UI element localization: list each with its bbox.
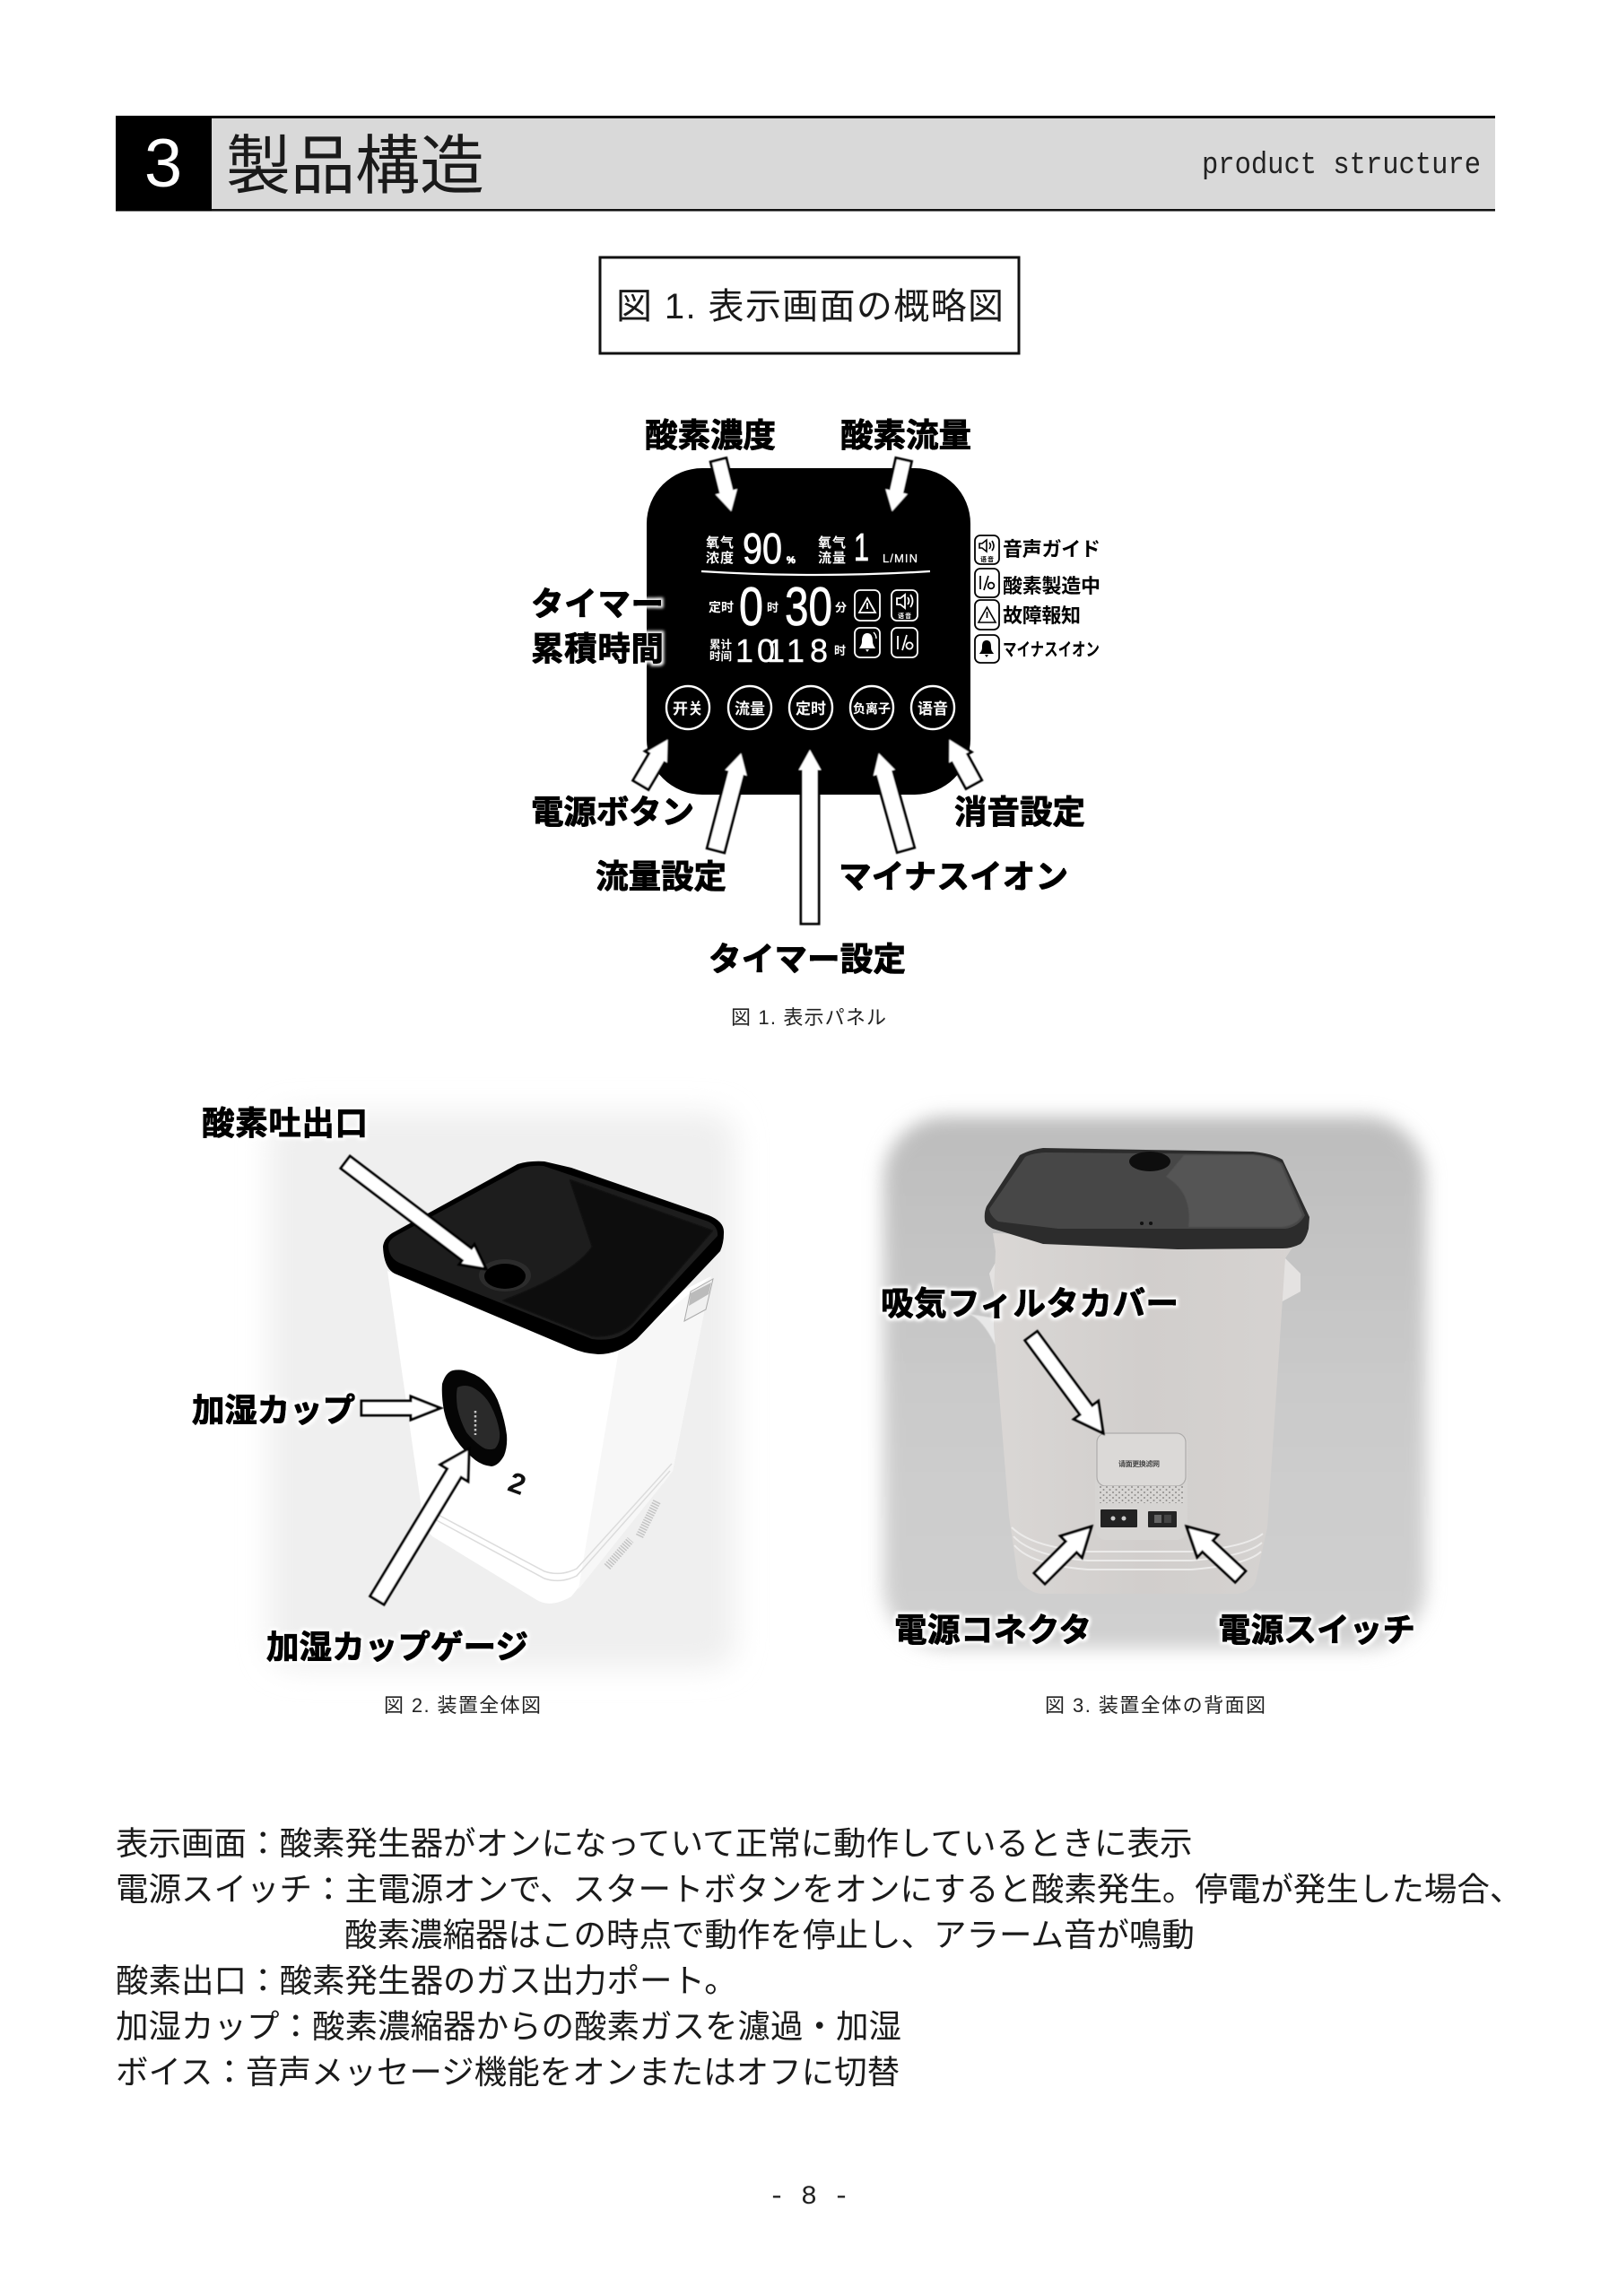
body ridges [431, 1464, 672, 1580]
button: flow [728, 686, 771, 729]
cumulative time readout: 时间 [709, 650, 732, 663]
arrow: to power button [629, 730, 681, 792]
oxygen concentration readout: % [787, 555, 796, 566]
cumulative time readout: 累计 [709, 638, 732, 651]
legend item: voice guide: 语音 [980, 555, 994, 563]
arrow: to cup gauge [363, 1440, 483, 1609]
label: cup gauge: 加湿カップゲージ [266, 1629, 528, 1665]
cumulative time readout: 时 [834, 644, 846, 657]
panel: black control panel [647, 468, 970, 795]
icon: voice [892, 590, 918, 621]
label: timer and cumulative: 累積時間 [531, 631, 664, 667]
icon: warning [855, 590, 880, 621]
lid dark reflection [502, 1179, 713, 1336]
arrow: to humidifier cup [361, 1396, 440, 1420]
button: flow: 流量 [735, 700, 765, 718]
arrow: to power connector [1029, 1516, 1102, 1589]
rear cover recess [1095, 1432, 1187, 1540]
lid [985, 1148, 1309, 1249]
english subtitle: product structure [1202, 149, 1481, 183]
photo background [883, 1117, 1426, 1648]
arrow: to concentration [705, 457, 745, 517]
arrow: to mute button [936, 731, 986, 791]
device body [387, 1271, 711, 1604]
lid reflection [1166, 1155, 1302, 1227]
label: oxygen concentration: 酸素濃度 [645, 417, 776, 454]
outlet hole [1129, 1152, 1170, 1171]
oxygen concentration readout: 氧 气 [706, 535, 734, 551]
label: humidifier cup: 加湿カップ [192, 1392, 355, 1429]
timer readout: 分 [835, 601, 847, 614]
power connector [1100, 1509, 1137, 1527]
oxygen flow readout: 氧 气 [818, 535, 846, 551]
timer readout: 0 [739, 577, 763, 637]
label: oxygen outlet: 酸素吐出口 [202, 1105, 368, 1142]
arrow: to flow button [702, 747, 755, 854]
lid [383, 1161, 724, 1354]
label: timer and cumulative: タイマー [531, 586, 664, 622]
display panel diagram [531, 417, 1100, 978]
lid top surface [989, 1152, 1305, 1229]
body ridges [1012, 1527, 1263, 1570]
oxygen flow readout: L/MIN [883, 552, 918, 565]
label: power switch: 電源スイッチ [1218, 1612, 1415, 1648]
description text: 加湿カップ：酸素濃縮器からの酸素ガスを濾過・加湿 [116, 2008, 901, 2045]
cumulative time readout: 10118 [735, 632, 828, 669]
button: timer: 定时 [796, 700, 826, 718]
button: negative ion: 负离子 [853, 701, 891, 716]
legend item: negative ion: マイナスイオン [1003, 640, 1100, 660]
description text: 酸素濃縮器はこの時点で動作を停止し、アラーム音が鳴動 [344, 1917, 1195, 1953]
timer readout [709, 577, 847, 637]
page number: - 8 - [769, 2182, 849, 2213]
oxygen concentration readout: 浓 度 [706, 550, 734, 566]
filter cover [1097, 1433, 1186, 1486]
arrow: to ion button [866, 747, 918, 854]
filter cover: 请面更换滤网 [1118, 1459, 1160, 1468]
legend item: negative ion [975, 635, 1100, 663]
button: voice: 语音 [918, 700, 948, 718]
oxygen flow readout: 1 [854, 526, 869, 570]
section title: 製品構造 [226, 131, 484, 203]
section header band [116, 116, 1495, 212]
body sheen at left [969, 1314, 996, 1345]
oxygen flow readout: 流 量 [818, 551, 846, 566]
cumulative time readout [709, 632, 846, 669]
caption: figure 3: 図 3. 装置全体の背面図 [1045, 1694, 1266, 1717]
handle recess [684, 1279, 713, 1321]
body shading [578, 1276, 711, 1589]
description text: ボイス：音声メッセージ機能をオンまたはオフに切替 [116, 2054, 900, 2091]
label: timer setting: タイマー設定 [709, 941, 906, 978]
arrow: to timer button [796, 747, 823, 924]
label: oxygen flow: 酸素流量 [840, 417, 971, 454]
icon: bell [855, 628, 880, 657]
label: timer and cumulative [531, 586, 664, 667]
button: timer [789, 686, 832, 729]
icon: power on-off [892, 628, 918, 657]
base vents [607, 1500, 657, 1567]
label: flow setting: 流量設定 [596, 858, 726, 895]
side handles [989, 1251, 1300, 1302]
button: power [666, 686, 709, 729]
printed mark: 2 [504, 1465, 530, 1501]
legend item: fault notice [975, 600, 1081, 630]
lid top surface [388, 1166, 718, 1340]
arrow: to filter cover [1019, 1326, 1116, 1442]
figure title box [600, 257, 1019, 353]
description text: 酸素出口：酸素発生器のガス出力ポート。 [116, 1962, 737, 1999]
description text [116, 1825, 1522, 2091]
photo: front view of device [192, 1105, 735, 1668]
button: voice [911, 686, 954, 729]
caption: figure 2: 図 2. 装置全体図 [384, 1694, 541, 1717]
timer readout: 定时 [709, 600, 734, 614]
oxygen concentration readout [706, 526, 796, 573]
description text: 電源スイッチ：主電源オンで、スタートボタンをオンにすると酸素発生。停電が発生した場合、 [116, 1871, 1522, 1908]
arrow: to oxygen outlet [338, 1152, 493, 1279]
perforated vent [1099, 1486, 1184, 1503]
label: intake filter cover: 吸気フィルタカバー [881, 1285, 1179, 1322]
legend item: oxygen production: 酸素製造中 [1003, 575, 1100, 597]
lid vent dots [1142, 1222, 1151, 1225]
power switch [1148, 1511, 1177, 1527]
oxygen outlet hole [479, 1259, 531, 1292]
photo background [269, 1112, 735, 1668]
button: negative ion [850, 686, 893, 729]
device body [993, 1233, 1296, 1594]
label: mute setting: 消音設定 [954, 794, 1085, 831]
oxygen flow readout [818, 526, 918, 570]
humidifier cup [442, 1370, 507, 1466]
arrow: to flow [878, 457, 917, 517]
caption: figure 1: 図 1. 表示パネル [731, 1006, 886, 1029]
section number: 3 [144, 126, 182, 202]
description text: 表示画面：酸素発生器がオンになっていて正常に動作しているときに表示 [116, 1825, 1193, 1862]
timer readout: 时 [767, 601, 779, 614]
oxygen concentration readout: 90 [743, 526, 782, 573]
label: power button: 電源ボタン [531, 794, 694, 831]
legend item: voice guide: 音声ガイド [1003, 538, 1100, 561]
timer readout: 30 [785, 577, 832, 637]
legend: icon key [975, 535, 1100, 663]
button: power: 开关 [673, 700, 703, 718]
icon: voice: 语音 [898, 612, 911, 620]
figure title box: 図 1. 表示画面の概略図 [616, 287, 1004, 326]
legend item: voice guide [975, 535, 1100, 564]
legend item: oxygen production [975, 569, 1100, 597]
arrow: to power switch [1176, 1516, 1251, 1587]
label: negative ion: マイナスイオン [839, 858, 1068, 895]
label: power connector: 電源コネクタ [894, 1612, 1092, 1648]
legend item: fault notice: 故障報知 [1003, 604, 1081, 627]
photo: rear view of device [881, 1117, 1426, 1648]
